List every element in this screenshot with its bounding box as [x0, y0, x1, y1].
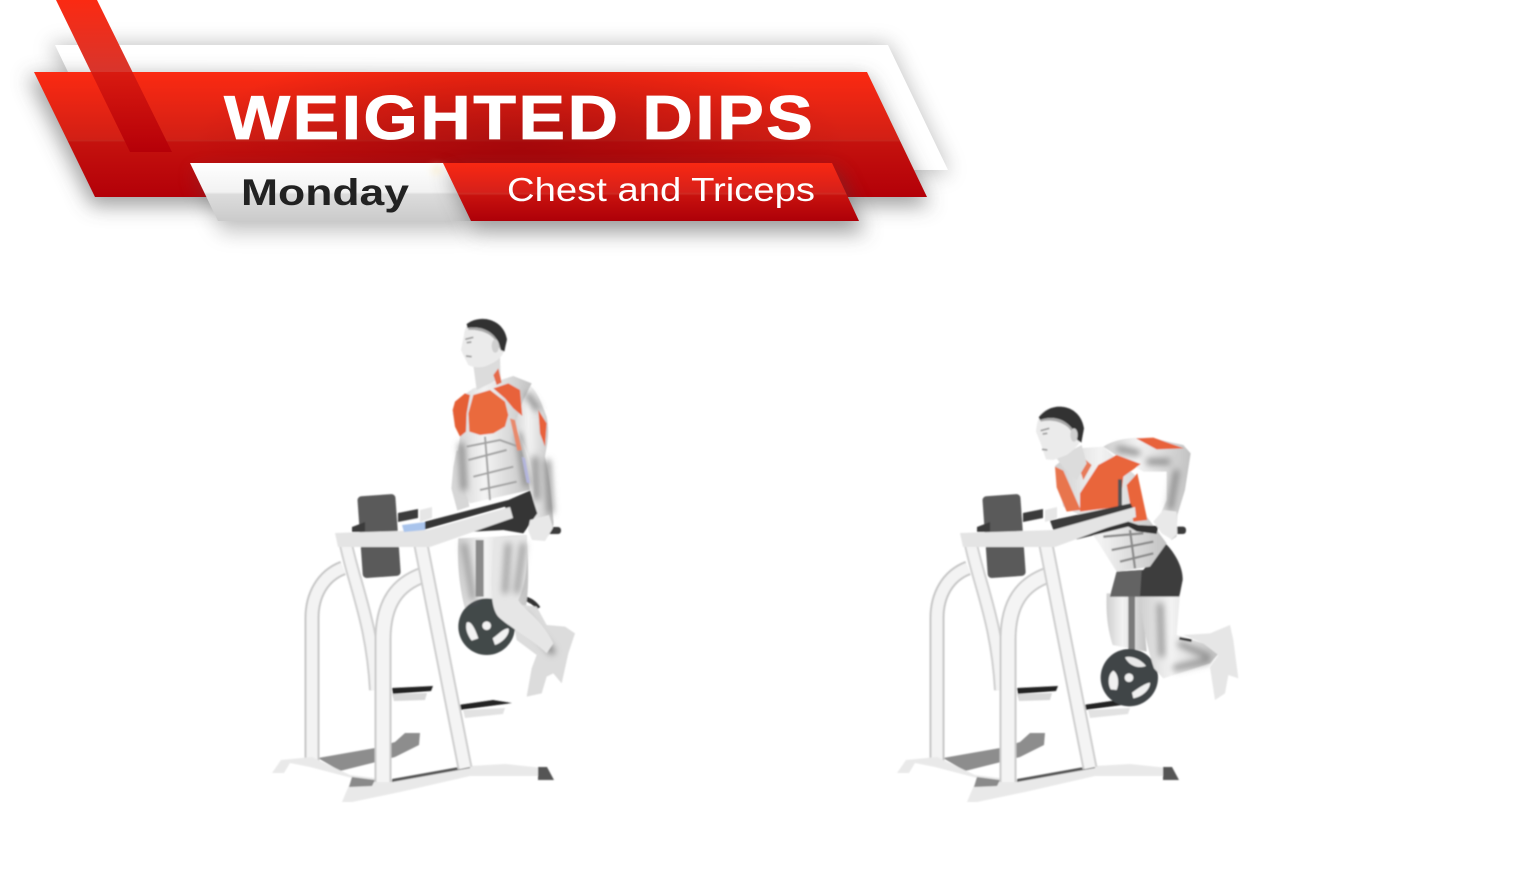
day label ribbon: Monday	[241, 171, 409, 213]
torso	[453, 376, 532, 503]
ab lines	[1103, 530, 1153, 568]
far arm	[451, 450, 469, 511]
muscle group ribbon: Chest and Triceps	[507, 172, 815, 209]
ankle dark strap	[1179, 638, 1192, 641]
eye and brow	[465, 337, 473, 357]
hair fade	[1040, 418, 1077, 440]
neck	[473, 355, 501, 390]
front thigh and calf	[1140, 593, 1218, 678]
near leg over plate	[491, 535, 553, 653]
white back ribbon	[50, 44, 950, 174]
torso	[1055, 447, 1167, 572]
near arm	[512, 383, 554, 539]
top crossbar	[335, 507, 513, 547]
serratus line	[510, 418, 522, 451]
torso and arm shading	[461, 393, 551, 513]
ear	[1070, 428, 1078, 442]
shorts	[1110, 542, 1183, 597]
thigh shading	[464, 543, 523, 600]
ab lines	[467, 437, 518, 500]
chest muscle	[1080, 455, 1141, 512]
belt	[1050, 503, 1136, 530]
athlete upper body	[1036, 407, 1191, 597]
dip belt	[425, 491, 537, 538]
strap	[1118, 479, 1122, 508]
dip machine frame	[897, 494, 1179, 802]
lat blue tint	[522, 457, 530, 483]
rear shorts leg	[1110, 570, 1142, 597]
dark calf strap behind knee	[508, 598, 538, 608]
ear	[492, 339, 499, 353]
hair	[467, 319, 507, 352]
figure: lowered position of weighted dip	[897, 407, 1238, 802]
belt strap	[1075, 522, 1158, 539]
banner	[28, 0, 950, 233]
red main ribbon	[28, 72, 930, 206]
far pectoral	[1055, 467, 1081, 512]
triceps	[538, 410, 547, 447]
hair fade	[468, 328, 501, 350]
eye and brow	[1041, 428, 1049, 450]
athlete lower body	[1101, 593, 1238, 706]
neck	[1057, 445, 1087, 480]
calf shading	[523, 615, 553, 653]
hand on bar	[528, 515, 561, 541]
legs	[458, 535, 528, 640]
far arm	[1103, 438, 1191, 540]
leg shading	[1160, 603, 1210, 668]
chain	[1128, 597, 1135, 650]
figure: top position of weighted dip	[272, 319, 575, 802]
chest muscles	[468, 390, 508, 435]
day label ribbon	[190, 163, 476, 232]
weight plate	[458, 598, 515, 655]
head	[1036, 407, 1083, 460]
athlete body	[451, 319, 575, 697]
hair	[1039, 407, 1084, 443]
head	[461, 319, 506, 367]
hand on bar	[1153, 510, 1186, 539]
rear thigh	[1106, 593, 1147, 652]
title: WEIGHTED DIPS	[224, 84, 815, 153]
diagonal accent stripe	[56, 0, 172, 152]
dip bar blue glint	[402, 522, 425, 532]
warm glow at ribbon junction	[431, 165, 443, 175]
front deltoid	[493, 383, 522, 416]
dip machine frame	[272, 494, 554, 802]
lower chest strip	[1127, 473, 1147, 522]
arm shading	[1117, 448, 1177, 510]
foot	[1183, 625, 1238, 700]
weight plate	[1101, 649, 1158, 706]
triceps	[1136, 438, 1184, 449]
neck trap	[493, 368, 502, 385]
chain	[476, 540, 484, 597]
lower leg and foot	[510, 603, 575, 697]
muscle group ribbon	[443, 163, 866, 233]
upper chest	[1080, 455, 1092, 480]
top crossbar	[960, 507, 1136, 547]
